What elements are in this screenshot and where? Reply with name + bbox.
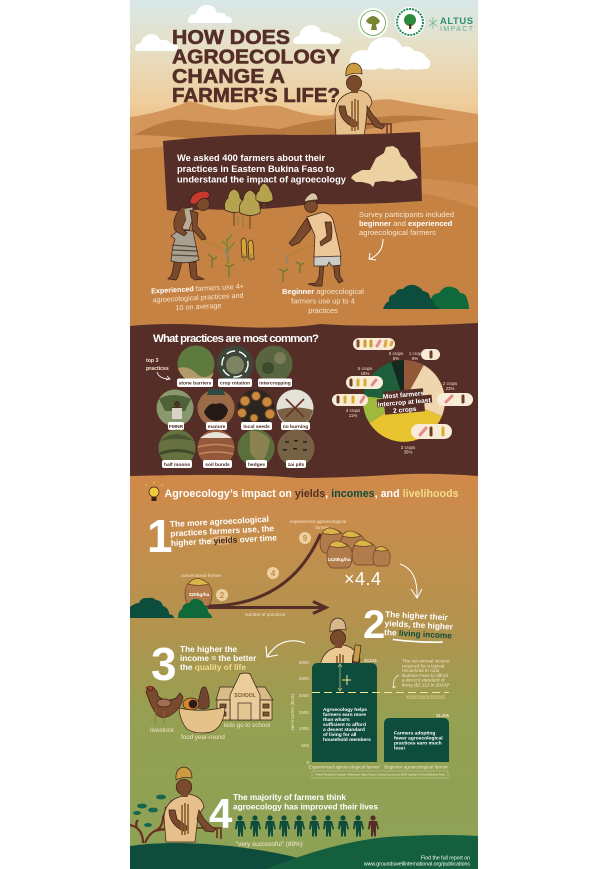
text: full report: www.groundswellinternational.org/publications: [364, 862, 470, 868]
icon: light bulb: [145, 481, 163, 501]
minimum label: annual income threshold: [406, 694, 445, 698]
title: HOW DOES: [172, 26, 290, 49]
text: beginner farmers: Beginner agroecological: [282, 287, 364, 296]
map: Burkina Faso: [351, 146, 418, 187]
photo: stone barriers: [177, 346, 214, 387]
pie labels: 4 crops: [346, 408, 361, 413]
photo: soil bunds: soil bunds: [205, 462, 230, 468]
axis labels: 1000: [299, 726, 309, 731]
photo: hedges: hedges: [248, 462, 265, 468]
icon labels: food year-round: [181, 734, 225, 741]
chart labels: number of practices: [245, 612, 286, 617]
icon: school: SCHOOL: [234, 693, 256, 699]
intro text: understand the impact of agroecology: [177, 174, 347, 184]
living income note: required for a typical: [402, 663, 444, 668]
text: step 1: [170, 513, 277, 548]
chart labels: conventional farmer: [181, 573, 222, 578]
pie labels: 23%: [446, 386, 454, 391]
chart: yields vs practices: 320kg/ha: [189, 592, 210, 598]
photo: crop rotation: crop rotation: [220, 381, 250, 387]
text: step 2: yields, the higher: [384, 618, 454, 632]
intro text: We asked 400 farmers about their: [177, 153, 326, 163]
photo: FMNR: [156, 390, 194, 430]
illustration: farmer with hoe: [335, 63, 391, 138]
values: $1,305: [436, 713, 450, 718]
text: survey participants: agroecological farmers: [359, 228, 436, 237]
photo: zai pits: zai pits: [288, 462, 305, 468]
arrow: to farmers: [369, 239, 383, 260]
title: FARMER’S LIFE?: [172, 84, 340, 107]
number 4: 4: [209, 790, 233, 837]
plus sign: [342, 675, 351, 685]
chart: yields vs practices: 1420kg/ha: [327, 557, 351, 563]
chart: net income bars: [290, 658, 450, 778]
text: step 1: higher the yields over time: [171, 532, 277, 548]
living income note: The net annual income: [402, 658, 450, 664]
logos: [358, 7, 474, 38]
title: AGROECOLOGY: [172, 46, 340, 68]
banner: survey intro: [163, 132, 422, 211]
text: step 2: the living income: [384, 627, 452, 641]
pie labels: 35%: [404, 450, 412, 454]
intro text: practices in Eastern Bukina Faso to: [177, 164, 335, 174]
living income note: Burkina Faso to afford: [402, 673, 448, 678]
pie labels: 1 crop: [409, 351, 422, 356]
chart: yields vs practices: [181, 519, 390, 617]
text: beginner farmers: farmers use up to 4: [291, 296, 355, 306]
axis labels: 0: [306, 760, 309, 765]
bar text: experienced: household members: [323, 737, 371, 743]
pie labels: 2 crops: [443, 381, 458, 386]
markers: 9: [303, 534, 308, 543]
photo: manure: manure: [208, 424, 226, 430]
markers: 2: [220, 591, 225, 600]
text: full report: Find the full report on: [421, 856, 470, 862]
bar text: experienced: than what’s: [323, 717, 350, 723]
chart labels: [181, 519, 346, 617]
callout: most farmers: 2 crops: [393, 406, 417, 415]
photo: intercropping: intercropping: [259, 381, 291, 387]
arrow: note: [392, 675, 399, 688]
arrow: number of practices: [208, 602, 326, 614]
markers: 4: [271, 569, 276, 578]
bar text: beginner: practices earn much: [394, 740, 442, 746]
photo: local seeds: local seeds: [243, 424, 270, 430]
text: step 4: The majority of farmers think: [233, 792, 346, 802]
icon labels: livestock: [150, 727, 175, 734]
text: step 3: the quality of life: [180, 662, 246, 672]
axis labels: 1500: [299, 710, 309, 715]
bar: beginner: [384, 718, 449, 762]
number 1: 1: [147, 510, 173, 562]
crop pills: [332, 338, 473, 439]
dashed line: living income: [312, 692, 449, 694]
values: [364, 658, 450, 718]
illustration: farmer with book: [320, 618, 361, 690]
arrow: to step 2: [400, 564, 422, 598]
axis labels: 2500: [299, 676, 309, 681]
text: experienced farmers: 10 on average: [175, 301, 222, 312]
title: CHANGE A: [172, 65, 285, 88]
icon labels: [150, 722, 270, 741]
icon: bushes: [383, 285, 469, 309]
bar text: experienced: farmers earn more: [323, 712, 366, 718]
heading: practices: What practices are most common?: [153, 333, 319, 345]
photo: manure: [198, 389, 234, 430]
pie labels: 5 crops: [358, 366, 373, 371]
label: top 3 practices: practices: [146, 366, 169, 372]
bar labels: [308, 764, 448, 770]
number 3: 3: [151, 638, 177, 690]
background gradient: [130, 0, 478, 869]
label: top 3 practices: top 3: [146, 358, 159, 364]
photo: soil bunds: [198, 430, 234, 468]
pie labels: 5%: [393, 356, 399, 361]
living income note: a decent standard of: [402, 678, 445, 682]
bar labels: Beginner agroecological farmer: [384, 764, 448, 770]
text: experienced farmers: Experienced farmers use 4+: [151, 282, 244, 295]
source box: *Anker Research Institute. Reference Value Report: Living Income and 2024 Update for Rural Burkina Faso: [315, 773, 445, 777]
text: experienced farmers: agroecological practices and: [152, 291, 244, 304]
hills: [130, 835, 478, 869]
photo: intercropping: [256, 346, 292, 387]
text: beginner farmers: practices: [308, 306, 338, 315]
multiplier: ×4.4: [344, 569, 381, 589]
text: very successful: “very successful” (89%): [236, 841, 303, 848]
arrow: to step 3: [266, 641, 305, 657]
living income note: household in rural: [402, 668, 439, 673]
bar labels: Experienced agroecological farmer: [308, 764, 380, 770]
bar text: beginner: fewer agroecological: [394, 736, 443, 742]
bar text: beginner: less!: [394, 746, 406, 752]
living income note: living ($2,112 in 2024)*: [402, 682, 450, 687]
text: step 2: The higher their: [385, 609, 449, 622]
axis labels: [299, 660, 309, 765]
text: step 3: The higher the: [180, 644, 238, 654]
text: step 1: practices farmers use, the: [170, 523, 275, 538]
bags: experienced: [320, 528, 390, 568]
bar: experienced: [312, 663, 377, 762]
illustration: trees and crops: [208, 183, 304, 282]
photo: half moons: half moons: [164, 462, 190, 468]
text: survey participants: beginner and experienced: [359, 219, 452, 228]
bag: conventional: [185, 578, 212, 606]
callout: most farmers: Most farmers: [383, 390, 425, 401]
photo: no burning: no burning: [283, 424, 308, 430]
illustration: beginner farmer: [286, 193, 343, 286]
illustration: experienced farmer woman: [168, 191, 228, 280]
photo: zai pits: [278, 430, 314, 468]
bar text: experienced: a decent standard: [323, 727, 365, 733]
illustration: farmer four: [164, 767, 221, 842]
axis labels: 500: [301, 743, 309, 748]
text: step 1: The more agroecological: [170, 514, 269, 529]
icon: chicken: [146, 686, 183, 724]
markers: [216, 532, 311, 601]
chart labels: experienced agroecological: [290, 519, 346, 524]
bar text: beginner: Farmers adopting: [394, 730, 435, 736]
arrow: top 3: [157, 372, 170, 380]
title: [172, 26, 340, 107]
bar text: experienced: of living for all: [323, 732, 357, 738]
bar text: experienced: sufficient to afford: [323, 722, 366, 728]
curve: [207, 535, 320, 606]
text: step 3: income = the better: [180, 653, 257, 663]
source box: [312, 771, 448, 778]
bar text: experienced: Agroecology helps: [323, 707, 367, 713]
photo: FMNR: FMNR: [169, 424, 184, 430]
icon labels: kids go to school: [224, 722, 270, 729]
panel: what practices are most common: [130, 323, 478, 478]
logos: ALTUS: [440, 15, 473, 26]
photo: no burning: [276, 390, 314, 430]
gap arrow: [338, 664, 342, 691]
illustration: acacia tree: [130, 795, 182, 843]
pie labels: 3 crops: [401, 445, 416, 450]
pie labels: [346, 351, 458, 454]
clouds: [135, 5, 430, 70]
axis labels: 2000: [299, 693, 309, 698]
axis title: Net income ($US): [290, 693, 295, 730]
logos: IMPACT: [440, 26, 474, 33]
icon: food basket: [179, 687, 225, 733]
text: step 2: [384, 609, 454, 644]
photo: crop rotation: [216, 346, 254, 387]
chart: crops pie: [332, 338, 473, 454]
chart labels: farmer: [315, 525, 329, 530]
pictogram: ten people: [235, 815, 379, 836]
heading: impact: [145, 481, 459, 501]
icon: bushes left: [130, 598, 212, 618]
photo: hedges: [238, 430, 274, 468]
text: survey participants: Survey participants included: [359, 210, 454, 219]
values: $3,041: [364, 658, 378, 663]
photo: half moons: [158, 430, 196, 468]
callout: most farmers: intercrop at least: [377, 397, 432, 409]
photo: local seeds: [237, 390, 275, 430]
axis labels: 3000: [299, 660, 309, 665]
impact text: Agroecology’s impact on yields, incomes, and livelihoods: [164, 488, 459, 500]
pie labels: 6 crops: [389, 351, 404, 356]
text: step 4: agroecology has improved their lives: [233, 802, 378, 812]
desert dunes: [130, 99, 478, 332]
photo: stone barriers: stone barriers: [179, 381, 212, 387]
number 2: 2: [363, 603, 385, 647]
pie labels: 18%: [361, 371, 369, 376]
pie labels: 8%: [412, 356, 418, 361]
pie labels: 11%: [349, 413, 357, 418]
callout: most farmers: [376, 388, 433, 416]
icon: school: [216, 673, 273, 720]
